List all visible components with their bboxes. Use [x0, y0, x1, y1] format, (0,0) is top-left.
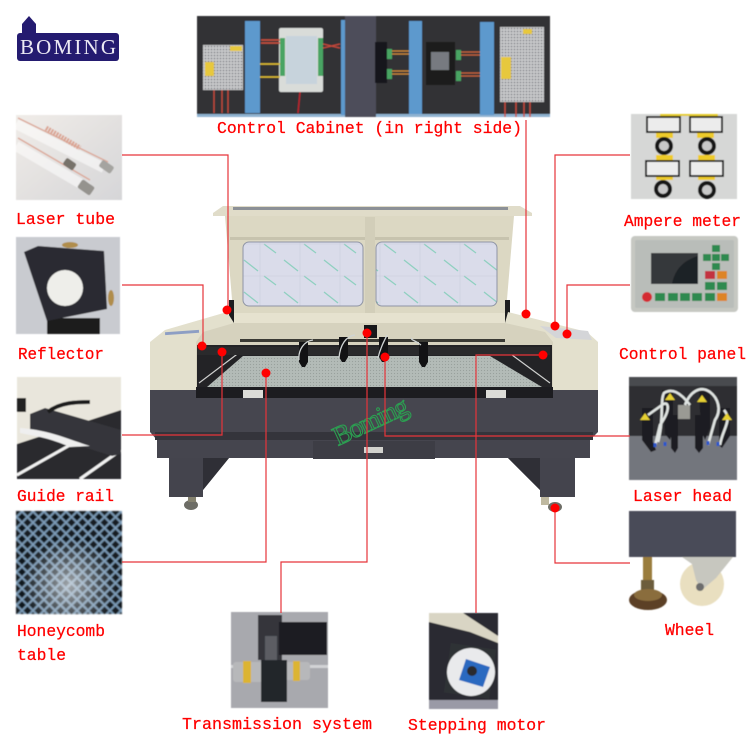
- photo: laser tube: [16, 115, 122, 200]
- logo: Boming: BOMING: [20, 35, 116, 59]
- label: guide rail: Guide rail: [17, 488, 114, 507]
- label: control panel: Control panel: [619, 346, 746, 365]
- machine lid: [213, 206, 532, 324]
- label: honeycomb table: table: [17, 647, 66, 666]
- machine body: [150, 312, 598, 512]
- logo: Boming: [17, 16, 119, 61]
- label: laser tube: Laser tube: [16, 211, 115, 230]
- label: stepping motor: Stepping motor: [408, 717, 546, 736]
- photo: ampere meter: [631, 114, 737, 199]
- callout dots: [198, 306, 572, 512]
- photo: wheel: [629, 511, 736, 610]
- photo: transmission system: [231, 612, 328, 708]
- callout lines: [122, 120, 630, 613]
- label: honeycomb table: [17, 623, 105, 666]
- label: reflector: Reflector: [18, 346, 104, 365]
- photo: laser head: [629, 377, 737, 480]
- photo: stepping motor: [429, 613, 498, 709]
- label: transmission system: Transmission system: [182, 716, 372, 735]
- label: control cabinet: Control Cabinet (in right side): [217, 120, 522, 139]
- photo: guide rail: [17, 377, 121, 479]
- label: ampere meter: Ampere meter: [624, 213, 741, 232]
- label: honeycomb table: Honeycomb: [17, 623, 105, 642]
- watermark: Boming: Boming: [328, 390, 413, 451]
- photo: control panel: [631, 236, 738, 312]
- label: wheel: Wheel: [665, 622, 714, 641]
- label: laser head: Laser head: [633, 488, 732, 507]
- machine laser heads: [299, 335, 428, 367]
- machine bed and honeycomb: [196, 325, 553, 453]
- photo: honeycomb table: [16, 511, 122, 614]
- photo: control cabinet: [197, 16, 550, 117]
- photo: reflector: [16, 237, 120, 334]
- machine: [150, 206, 598, 512]
